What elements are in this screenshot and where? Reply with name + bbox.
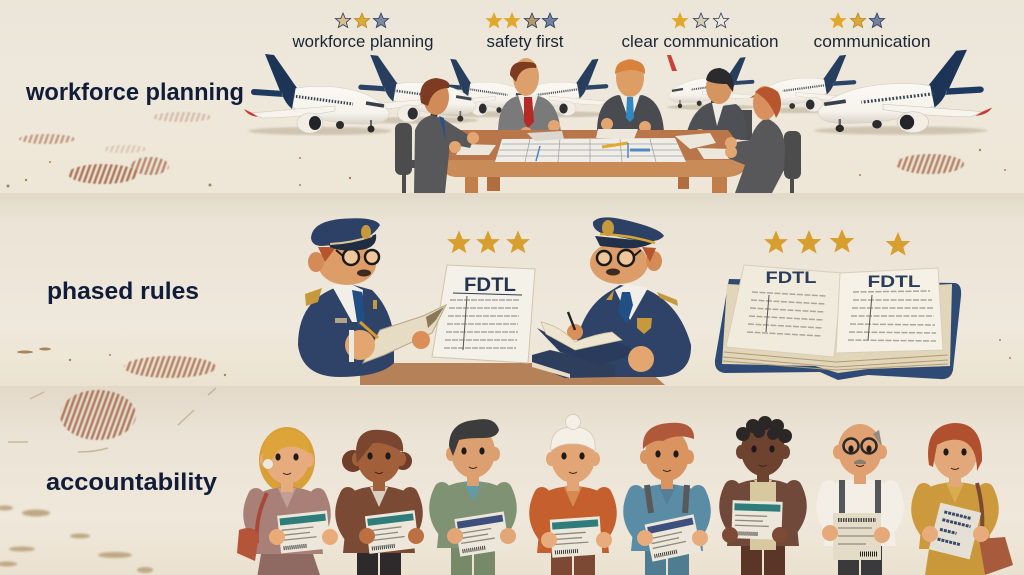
passenger: blonde woman [237, 427, 338, 575]
plane: right foreground [815, 50, 992, 135]
heading: accountability: accountability [46, 469, 218, 496]
passenger: brown hair woman [342, 430, 424, 575]
meeting scene [395, 58, 801, 193]
heading: phased rules: phased rules [47, 278, 199, 305]
back seated person with blue tie [597, 59, 664, 133]
top label: safety first: safety first [486, 33, 564, 51]
passenger: dark hair man [437, 419, 516, 575]
panel: phased rules [0, 193, 1024, 386]
right chair [755, 131, 801, 193]
passenger: older man with glasses [822, 424, 896, 575]
document: FDTL [432, 265, 535, 363]
panel: accountability [0, 386, 1024, 575]
passenger: man with curly hair [722, 416, 799, 575]
stars above open book [764, 229, 910, 256]
top label: clear communication: clear communication [622, 33, 778, 51]
papers on table [456, 129, 736, 159]
document: FDTL: FDTL [464, 275, 516, 296]
planes behind the table [352, 55, 861, 124]
left chair [395, 123, 438, 193]
rating stars: communication [830, 13, 885, 27]
open book: FDTL: FDTL [766, 268, 816, 287]
passenger: white hair woman [537, 414, 612, 575]
top label: workforce planning: workforce planning [291, 33, 434, 51]
passenger: red curly hair woman [919, 423, 1013, 575]
pilot writing in a book [532, 217, 691, 378]
planning chart on table [495, 138, 686, 162]
back seated person with red tie [498, 58, 561, 139]
heading: workforce planning: workforce planning [25, 79, 244, 106]
hatched smudge mark [124, 356, 216, 378]
rating stars: workforce planning [335, 13, 389, 27]
rating stars: safety first [486, 13, 558, 27]
hatched smudge mark [60, 390, 136, 440]
panel: workforce planning [0, 0, 1024, 193]
wall texture and sand [0, 388, 216, 573]
brown desk surface [360, 363, 665, 385]
back right seated person [686, 68, 752, 141]
right seated person [725, 86, 785, 193]
table [442, 129, 746, 193]
pilot reading a book [298, 218, 446, 377]
hatched smudge marks on ground [19, 112, 964, 184]
ground specks [6, 149, 1006, 188]
plane: left foreground [244, 54, 392, 135]
passenger: man in blue [631, 423, 708, 575]
top label: communication: communication [814, 33, 930, 51]
open book: FDTL: FDTL [868, 272, 920, 291]
left seated woman [414, 78, 479, 193]
open book: FDTL [715, 265, 961, 380]
ground specks [17, 339, 1011, 376]
rating stars: clear communication [672, 13, 729, 27]
stars above document [447, 230, 530, 253]
